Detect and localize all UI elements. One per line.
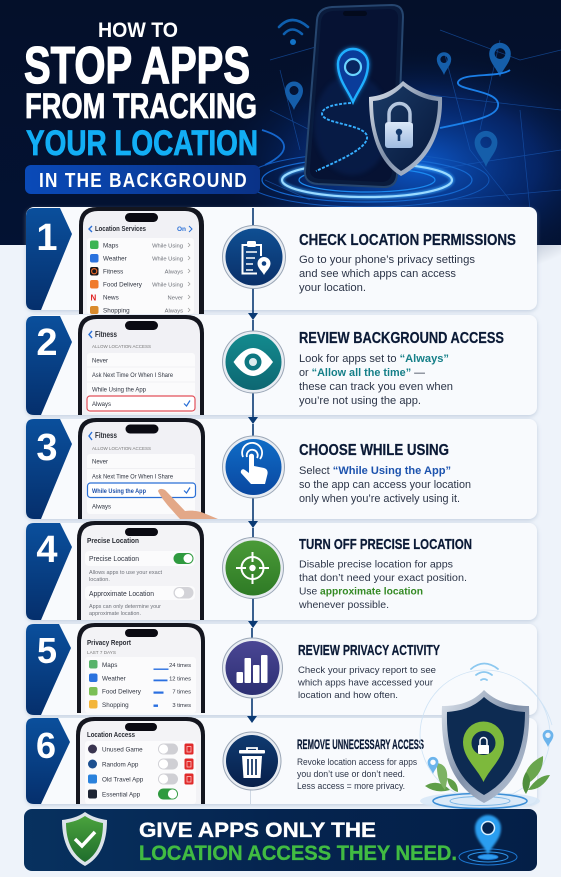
phone: location services: Weather <box>103 256 127 262</box>
text: choose while using: only when you’re actively using it. <box>299 493 460 505</box>
toggles <box>158 744 178 800</box>
number badge 6: 6 <box>36 725 56 766</box>
number badge 2: 2 <box>36 322 58 364</box>
number badge 1: 1 <box>36 217 58 259</box>
subtitle pill: IN THE BACKGROUND <box>39 170 248 192</box>
subtitle pill <box>25 165 260 194</box>
phone: location services: Always <box>165 270 183 276</box>
phone: location access: Random App <box>102 762 139 768</box>
phone: privacy report: Weather <box>102 676 126 682</box>
number badge 3: 3 <box>36 427 58 469</box>
location pin on screen <box>337 48 369 103</box>
number badge 5 <box>26 624 71 715</box>
privacy shield illustration <box>420 664 553 810</box>
phone: fitness always: Always <box>92 401 111 408</box>
title <box>24 18 258 163</box>
text: review background access: you’re not using the app. <box>299 395 421 407</box>
text: turn off precise location: that don’t need your exact position. <box>299 573 467 584</box>
text: choose while using: so the app can access your location <box>299 479 471 491</box>
security shield <box>369 81 442 176</box>
title: YOUR LOCATION <box>26 124 258 163</box>
text: turn off precise location: Use approximate location <box>299 586 423 598</box>
banner text: LOCATION ACCESS THEY NEED. <box>139 842 457 865</box>
phone: location access: Essential App <box>102 792 141 798</box>
text: review privacy activity: REVIEW PRIVACY ACTIVITY <box>298 643 440 659</box>
text: review privacy activity <box>297 643 440 701</box>
text: review privacy activity: location and how often. <box>298 690 398 701</box>
phone: fitness while using: Ask Next Time Or When I Share <box>92 474 173 480</box>
phone: privacy report: Maps <box>102 662 117 669</box>
phone: precise location: approximate location. <box>89 611 141 617</box>
panel: step 3 <box>26 418 471 519</box>
phone: fitness while using: Always <box>92 504 111 510</box>
text: review background access <box>299 330 504 407</box>
text: check location permissions: CHECK LOCATION PERMISSIONS <box>299 232 516 249</box>
hand pointing <box>158 489 218 519</box>
panel: step 4 <box>26 521 472 620</box>
phone: privacy report: Food Delivery <box>102 688 142 696</box>
target rings <box>245 153 489 207</box>
signal arcs <box>471 664 498 680</box>
phone: privacy report: 24 times <box>169 663 191 669</box>
text: remove unnecessary access: Revoke location access for apps <box>297 757 417 767</box>
phone: fitness while using: While Using the App <box>92 488 146 495</box>
header background <box>0 0 561 285</box>
phone: privacy report <box>77 623 205 713</box>
phone: location services: Maps <box>103 242 118 250</box>
phone: precise location <box>77 521 204 620</box>
phone: privacy report: LAST 7 DAYS <box>87 650 116 655</box>
number badge 4 <box>26 523 72 620</box>
number badge 4: 4 <box>36 529 58 571</box>
padlock <box>385 104 413 148</box>
phone: fitness while using <box>78 418 218 519</box>
phone: fitness always: Ask Next Time Or When I Share <box>92 372 173 379</box>
usage bars <box>154 668 168 707</box>
phone: privacy report: Shopping <box>102 702 129 709</box>
text: turn off precise location: TURN OFF PRECISE LOCATION <box>299 536 472 553</box>
phone: fitness always: ALLOW LOCATION ACCESS <box>92 344 151 349</box>
phone: privacy report: 12 times <box>169 676 191 682</box>
phone: location services: Never <box>168 296 183 302</box>
timeline connector <box>247 208 258 804</box>
text: turn off precise location: whenever possible. <box>298 600 389 611</box>
phone: location services: On <box>177 226 186 233</box>
phone: precise location: Precise Location <box>87 536 139 545</box>
phone: fitness always: Never <box>92 358 108 364</box>
phone: location services <box>79 207 204 314</box>
number badge 2 <box>26 316 72 415</box>
text: remove unnecessary access <box>297 737 424 791</box>
phone: precise location: Precise Location <box>89 554 139 563</box>
small pins <box>428 730 553 774</box>
phone: location access: Location Access <box>87 732 135 739</box>
phone: location services: While Using <box>152 282 183 288</box>
text: check location permissions: and see which apps can access <box>299 268 456 280</box>
dashed route <box>316 103 367 171</box>
text: turn off precise location: Disable precise location for apps <box>299 560 453 570</box>
text: review background access: REVIEW BACKGROUND ACCESS <box>299 330 504 347</box>
text: review background access: or “Allow all the time” — <box>299 367 425 379</box>
map pins <box>285 43 511 167</box>
title: STOP APPS <box>24 37 250 95</box>
phone: location services: Shopping <box>103 308 130 314</box>
phone: precise location: Approximate Location <box>89 589 154 598</box>
phone: location access: Unused Game <box>102 746 143 754</box>
toggle off <box>174 587 194 598</box>
phone: location services: While Using <box>152 256 183 262</box>
ripples <box>420 792 540 810</box>
icon: clipboard with pin <box>222 226 286 288</box>
phone: fitness always: Fitness <box>95 330 117 339</box>
panel: step 5 <box>26 623 440 715</box>
text: choose while using: Select “While Using the App” <box>299 465 451 477</box>
phone: location services: Location Services <box>95 226 146 233</box>
text: review privacy activity: which apps have accessed your <box>297 678 434 688</box>
text: check location permissions: Go to your phone’s privacy settings <box>299 254 475 266</box>
text: review background access: Look for apps set to “Always” <box>299 353 449 365</box>
icon: glowing pin <box>459 815 517 865</box>
phone: privacy report: Privacy Report <box>87 638 131 647</box>
text: turn off precise location <box>298 536 472 611</box>
panel: step 1 <box>26 207 516 314</box>
text: review privacy activity: Check your privacy report to see <box>298 665 436 676</box>
phone: precise location: Apps can only determine your <box>89 604 161 610</box>
icon: bar chart <box>222 638 282 698</box>
panel: step 6 <box>26 717 424 804</box>
text: choose while using: CHOOSE WHILE USING <box>299 442 449 459</box>
text: remove unnecessary access: Less access = more privacy. <box>297 781 405 791</box>
phone: fitness while using: Never <box>92 458 108 466</box>
panel: step 2 <box>26 315 504 415</box>
number badge 6 <box>26 718 70 804</box>
step cards <box>26 207 537 804</box>
number badge 1 <box>26 208 72 310</box>
phone: location services: N <box>90 294 96 302</box>
phone: location services: While Using <box>152 244 183 250</box>
closing banner <box>24 809 537 871</box>
leaves <box>425 756 550 794</box>
title: HOW TO <box>98 18 178 42</box>
banner text <box>139 819 457 865</box>
phone: fitness while using: ALLOW LOCATION ACCESS <box>92 446 151 451</box>
text: remove unnecessary access: REMOVE UNNECESSARY ACCESS <box>297 737 424 752</box>
icon: green check shield <box>62 812 107 866</box>
number badge 3 <box>26 419 72 519</box>
toggle on <box>174 553 194 564</box>
phone: precise location: location. <box>89 577 110 583</box>
phone: precise location: Allows apps to use your exact <box>89 570 162 576</box>
banner text: GIVE APPS ONLY THE <box>139 819 376 842</box>
icon: eye <box>222 331 284 393</box>
wifi signal icon <box>279 20 308 45</box>
phone: fitness always <box>78 315 204 415</box>
green pin <box>463 722 504 782</box>
arrows <box>247 313 258 723</box>
phone: location access <box>76 717 205 804</box>
delete buttons <box>184 744 194 784</box>
phone: location services: News <box>103 294 119 302</box>
phone: privacy report: 3 times <box>172 703 191 709</box>
phone: location access: Old Travel App <box>102 776 144 784</box>
text: remove unnecessary access: you don’t use or don’t need. <box>297 769 405 779</box>
phone: fitness always: While Using the App <box>92 386 146 394</box>
phone: fitness while using: Fitness <box>95 431 117 440</box>
icon: tap hand <box>222 436 284 498</box>
phone: location services: Always <box>165 308 183 314</box>
phone: location services: Fitness <box>103 268 123 276</box>
text: choose while using <box>299 442 471 505</box>
title: FROM TRACKING <box>25 87 257 126</box>
icon: crosshair <box>222 538 284 598</box>
number badge 5: 5 <box>37 630 57 671</box>
phone: privacy report: 7 times <box>172 690 191 696</box>
text: check location permissions <box>299 232 516 294</box>
icon: trash <box>223 732 281 790</box>
route lines <box>262 70 510 165</box>
text: check location permissions: your location. <box>299 282 366 294</box>
text: review background access: these can track you even when <box>299 381 453 393</box>
phone: location services: Food Delivery <box>103 282 143 288</box>
phone illustration <box>305 5 403 187</box>
